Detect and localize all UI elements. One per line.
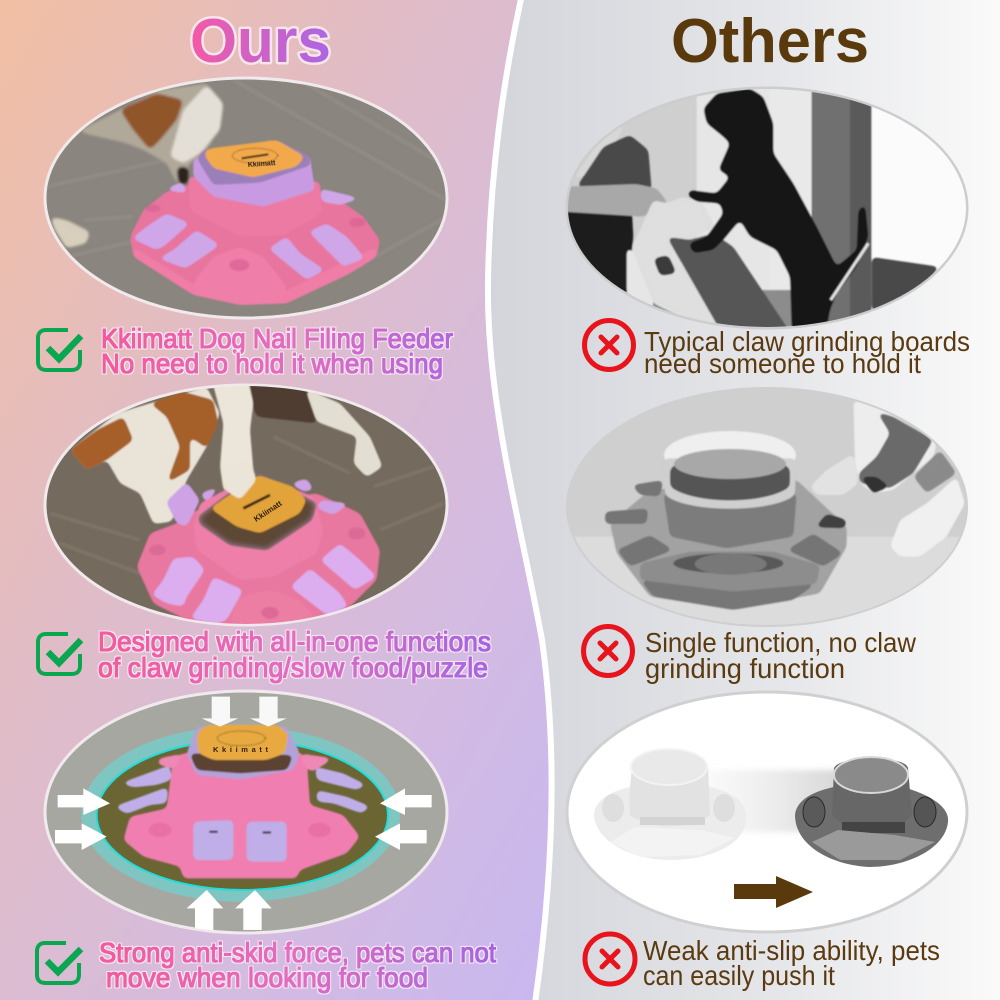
cup and food (187, 727, 300, 779)
caption: others 2: Single function, no claw (645, 627, 916, 658)
dog (687, 88, 868, 330)
feeder body (130, 184, 380, 291)
heading: Others: Others (671, 7, 869, 76)
caption: others 3: Weak anti-slip ability, pets (643, 935, 940, 966)
check icon 2 (38, 634, 81, 674)
arrows: top (202, 697, 287, 727)
arrows: right (375, 788, 432, 850)
lid (197, 725, 288, 760)
floor planks (50, 437, 443, 573)
panel: others photo 2, grey slow feeder (567, 388, 973, 627)
dog head (70, 387, 220, 524)
teal ring (81, 726, 400, 902)
caption: others 1 (644, 326, 970, 379)
feeder body (123, 750, 360, 878)
check icon 3 (37, 943, 81, 983)
caption: others 2 (645, 627, 916, 684)
dog (853, 400, 937, 493)
purple tabs (132, 182, 365, 280)
cyan line and olive base (97, 740, 388, 890)
purple tabs (114, 765, 371, 862)
motion blur (700, 770, 850, 832)
panel: ours photo 1, feeder on floor with dog (45, 78, 447, 318)
caption: ours 3 (99, 937, 496, 993)
caption: ours 1: No need to hold it when using (101, 348, 443, 379)
ghost feeder (594, 749, 746, 860)
wall and curtains (695, 89, 771, 291)
brand mark 1: Kkiimatt (248, 160, 276, 169)
panel: others photo 1, person holding grinding board (563, 87, 972, 332)
cross icon 2 (584, 626, 632, 676)
caption: ours 2 (98, 626, 491, 683)
caption: ours 1 (101, 323, 453, 379)
brand mark 2: Kkiimatt (252, 499, 284, 524)
caption: ours 2: Designed with all-in-one functions (98, 626, 491, 657)
cross icon 3 (585, 934, 635, 984)
small food (815, 513, 847, 528)
caption: ours 1: Kkiimatt Dog Nail Filing Feeder (101, 323, 453, 354)
glass bowl and food (198, 473, 317, 550)
floor light band (573, 537, 973, 627)
tower (187, 176, 322, 194)
panel: ours photo 3, anti-skid force (45, 691, 447, 933)
lid (210, 475, 307, 533)
tower (196, 489, 321, 578)
feeder base (610, 480, 847, 610)
dog (50, 83, 223, 248)
carpet (870, 256, 938, 309)
caption: ours 3: move when looking for food (106, 962, 428, 993)
feeder body (137, 493, 380, 628)
feeder front (640, 580, 817, 610)
caption: ours 3: Strong anti-skid force, pets can not (99, 937, 496, 968)
dog front leg (213, 386, 254, 491)
arrows: bottom (187, 890, 272, 930)
heading: Ours: Ours (190, 7, 331, 76)
panel: others photo 3, feeder pushed sideways (567, 692, 967, 932)
check icon 1 (38, 330, 81, 370)
arrows: left (55, 788, 110, 850)
caption: others 3 (643, 935, 940, 991)
cross icon 1 (584, 320, 634, 370)
lid (203, 140, 305, 177)
dog body (70, 373, 383, 524)
caption: others 3: can easily push it (643, 960, 835, 991)
brand mark 3: Kkiimatt (213, 745, 268, 754)
caption: others 1: Typical claw grinding boards (644, 326, 970, 357)
bowl and food (664, 431, 796, 479)
arrow (734, 876, 813, 908)
feeder tabs (605, 480, 843, 567)
purple tabs (152, 543, 377, 624)
tower (663, 493, 797, 548)
feeder scallop and buttons (196, 248, 285, 290)
caption: others 2: grinding function (645, 653, 845, 684)
paw (226, 472, 257, 500)
feeder shapes (114, 725, 371, 878)
floor planks (47, 79, 446, 258)
panel: ours photo 2, dog using feeder (45, 373, 447, 630)
background: Ours side (0, 0, 560, 1000)
caption: others 1: need someone to hold it (644, 348, 921, 379)
caption: ours 2: of claw grinding/slow food/puzzle (98, 652, 488, 683)
dog back leg (305, 388, 383, 477)
cup (193, 140, 315, 207)
grinding board (631, 197, 717, 323)
dark feeder (795, 757, 948, 867)
background: Others side with wavy white divider (488, 0, 1000, 1000)
person (578, 128, 621, 177)
